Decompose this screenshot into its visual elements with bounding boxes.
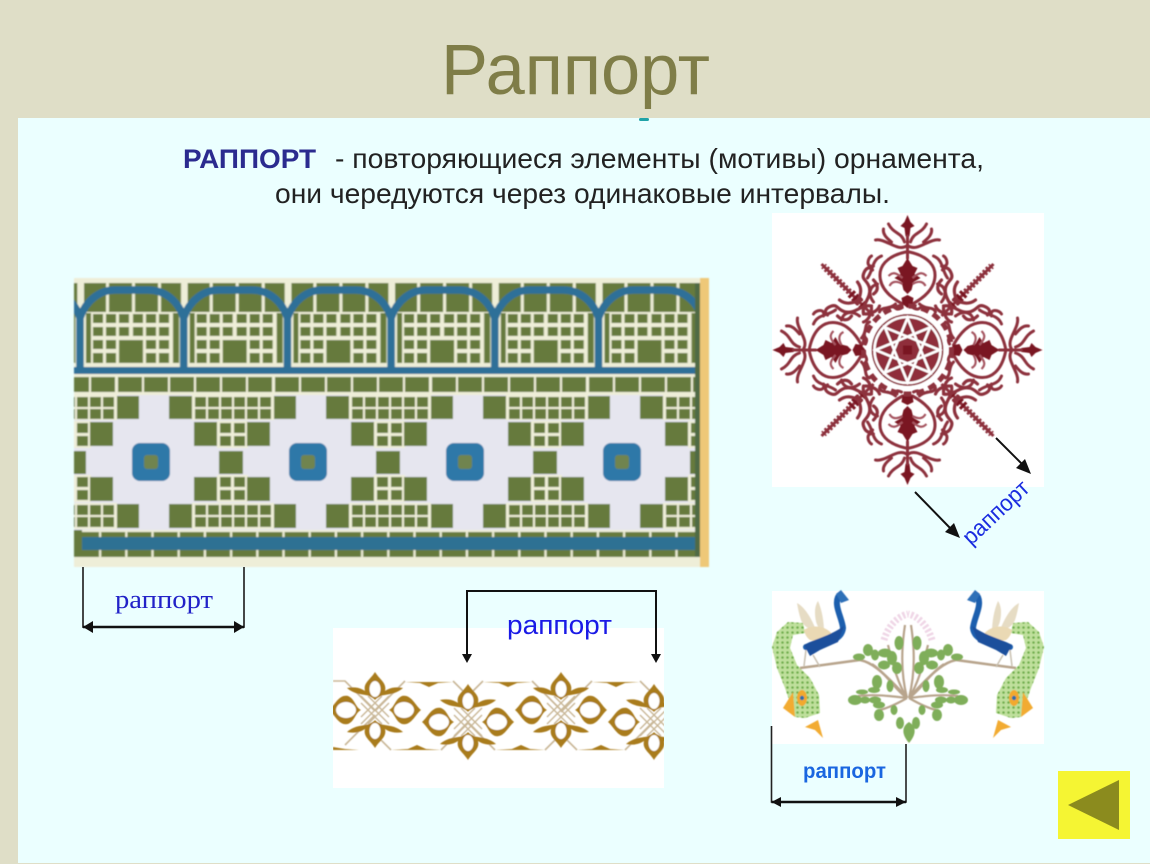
bracket: gold border repeat [462,591,661,663]
panel: tile ornament [74,278,709,567]
label: rosette repeat: раппорт [957,474,1035,550]
definition text: - повторяющиеся элементы (мотивы) орнамента, [335,143,984,174]
label: tile repeat: раппорт [115,585,213,614]
definition text [183,143,984,209]
panel: rosette ornament [772,213,1044,487]
label: peacock repeat: раппорт [803,760,886,783]
bracket: peacock repeat [772,726,906,807]
back button [1058,771,1130,839]
label: gold border repeat: раппорт [507,610,612,640]
definition text: РАППОРТ [183,144,317,174]
left bracket: repeat width on tile ornament [83,567,244,633]
arrows: rosette repeat [915,438,1031,538]
panel: peacocks and tree [772,590,1044,744]
clipped teal mark [639,118,649,121]
title: Раппорт [441,31,710,110]
panel: gold border [333,628,664,788]
definition text: они чередуются через одинаковые интервалы. [275,178,890,209]
